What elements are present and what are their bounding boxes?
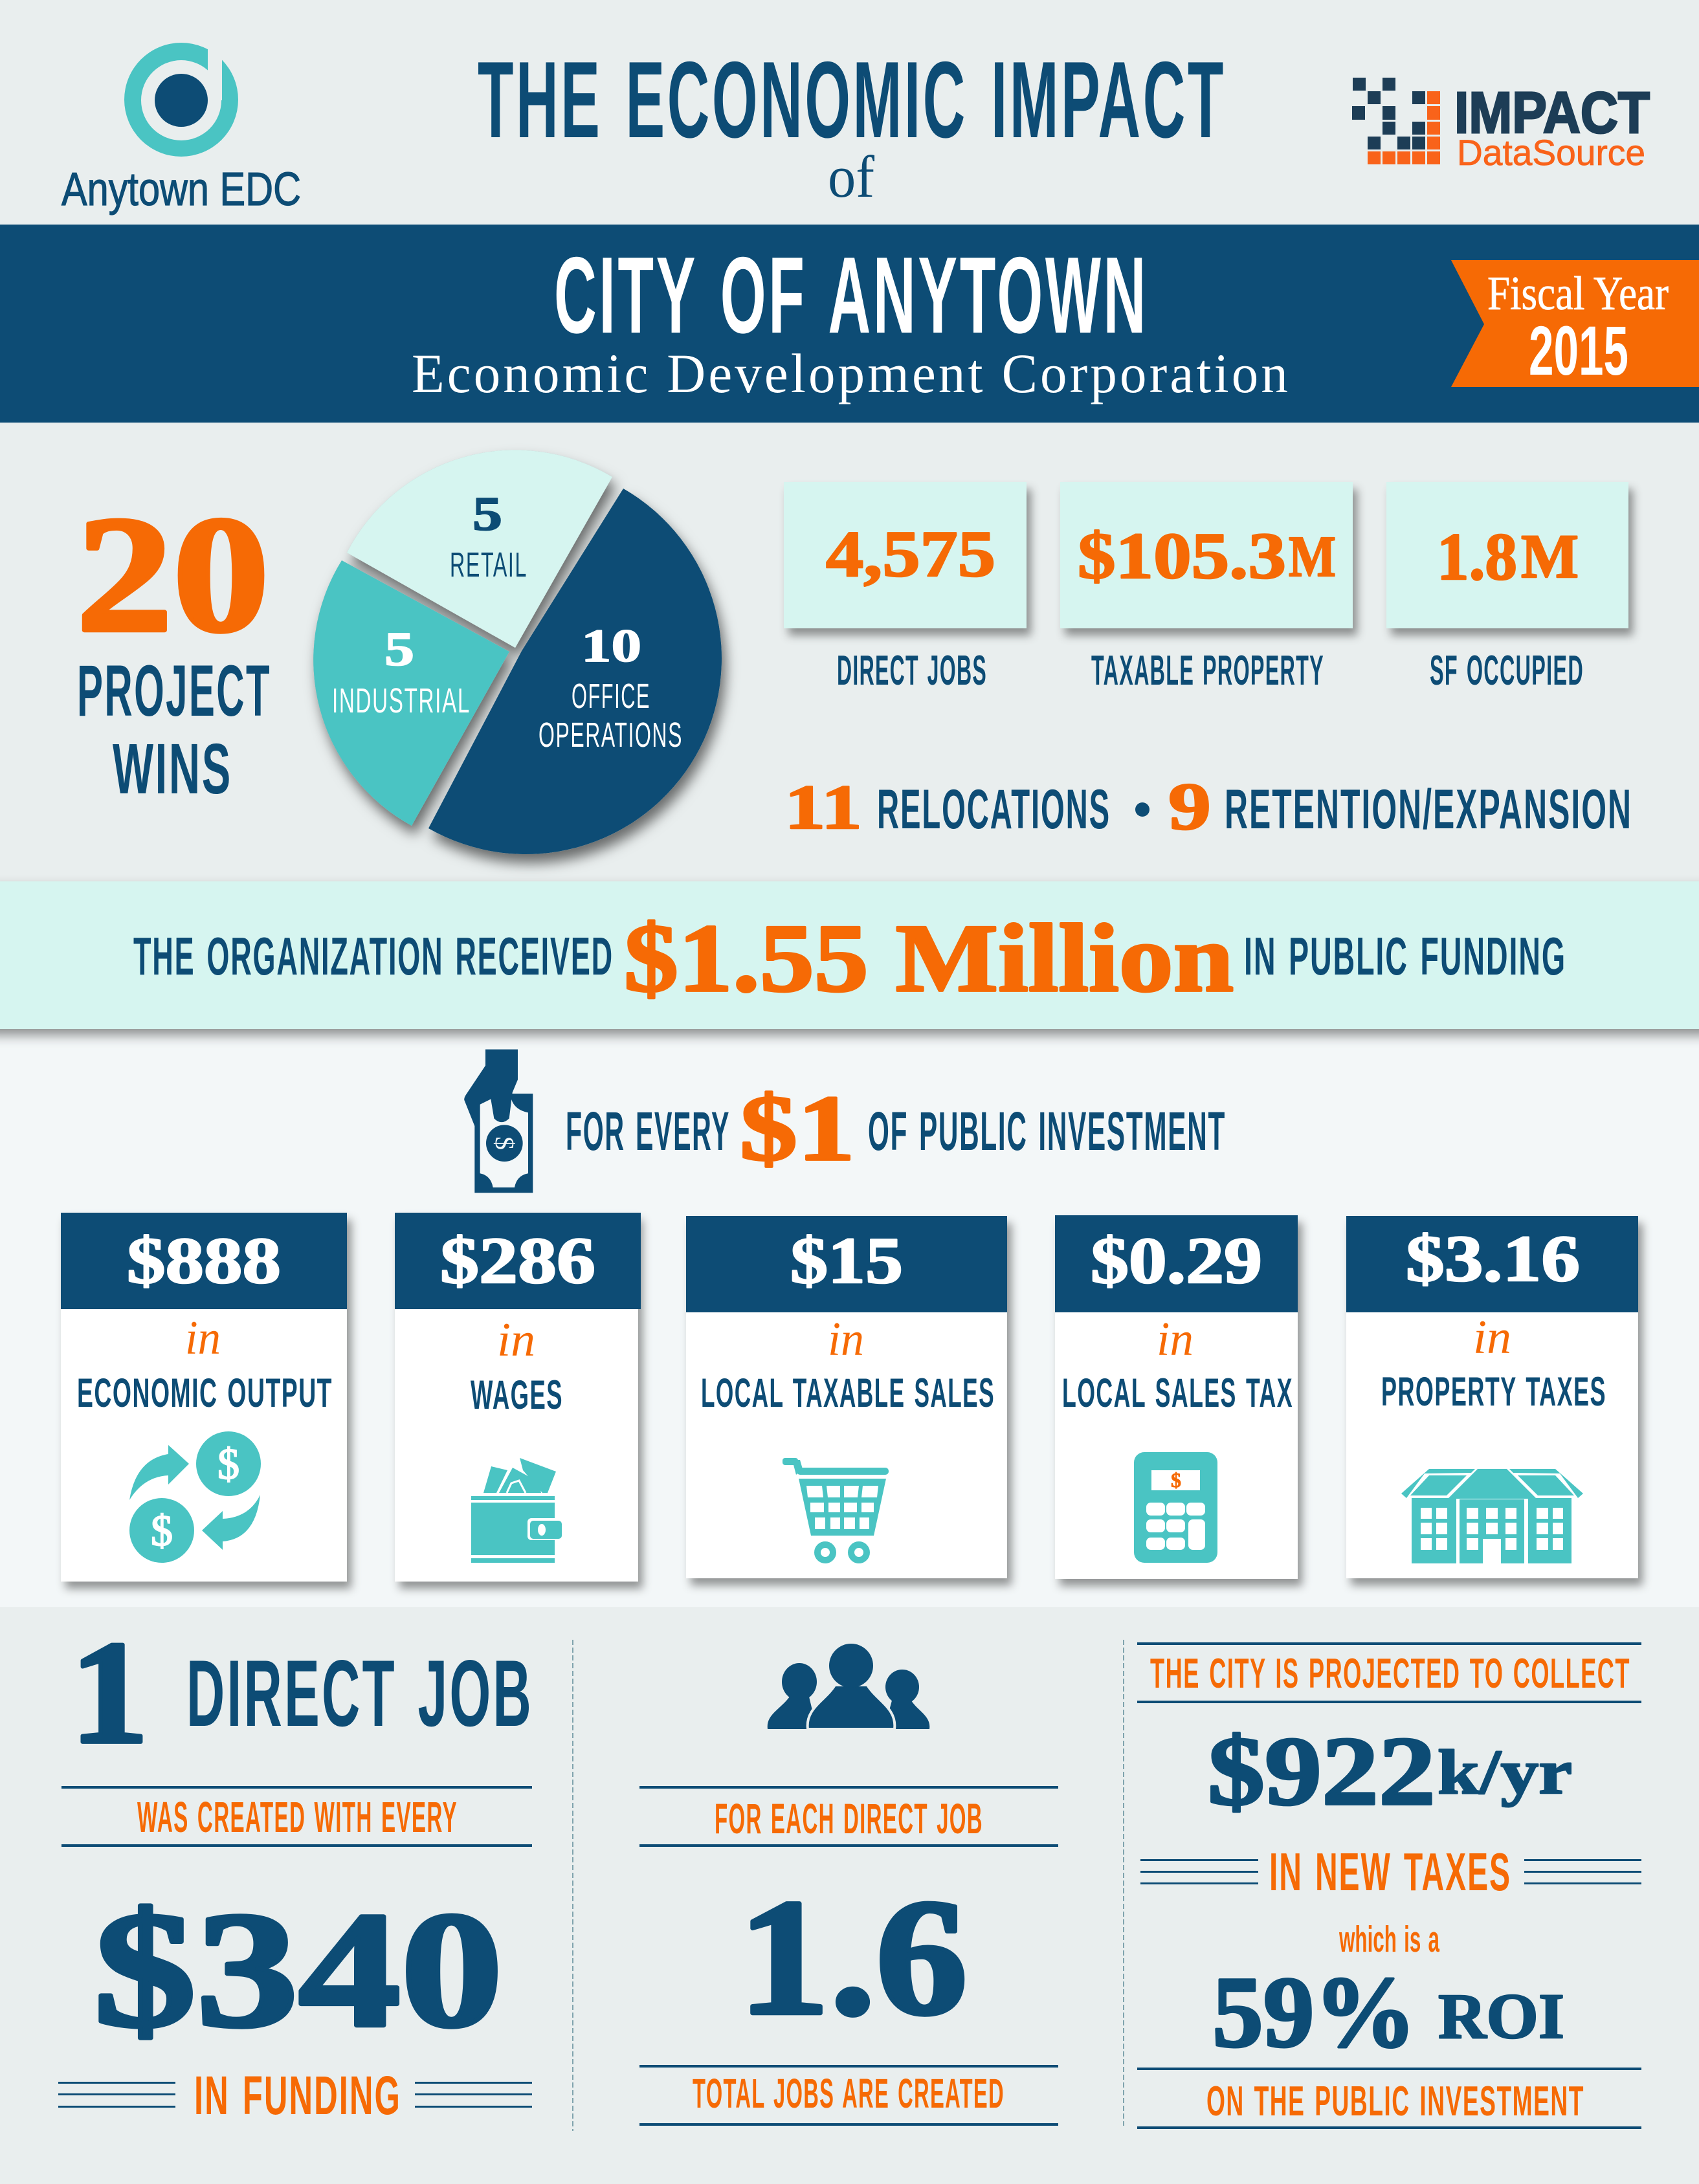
- relocations and retention line: 9: [1168, 769, 1211, 844]
- icon: wallet: [471, 1458, 562, 1563]
- column: total jobs: TOTAL JOBS ARE CREATED: [693, 2070, 1005, 2117]
- card: economic output: ECONOMIC OUTPUT: [77, 1371, 333, 1416]
- label: industrial: [332, 623, 471, 720]
- icon: calculator: $: [1171, 1468, 1181, 1492]
- card: economic output: $888: [127, 1224, 281, 1297]
- funding band: $1.55 Million: [624, 905, 1234, 1012]
- card: local taxable sales: [686, 1216, 1007, 1578]
- label: office operations: OPERATIONS: [539, 716, 683, 755]
- column: total jobs: FOR EACH DIRECT JOB: [715, 1794, 983, 1842]
- label: industrial: INDUSTRIAL: [332, 681, 471, 720]
- label: office operations: [539, 620, 683, 755]
- card: economic output: in: [185, 1312, 221, 1365]
- icon: building: [1401, 1469, 1583, 1563]
- relocations and retention line: [784, 769, 1632, 844]
- logo: Impact DataSource: [1352, 78, 1650, 173]
- stat: square feet occupied: 1.8: [1437, 520, 1517, 594]
- logo: Impact DataSource: DataSource: [1457, 132, 1645, 173]
- logo: Anytown EDC: Anytown EDC: [61, 164, 301, 215]
- relocations and retention line: RELOCATIONS: [877, 778, 1111, 841]
- stat: square feet occupied: [1386, 482, 1628, 694]
- banner heading: CITY OF ANYTOWN: [554, 234, 1148, 356]
- title: of: [828, 144, 874, 210]
- column: direct job funding: IN FUNDING: [194, 2065, 401, 2126]
- funding band: THE ORGANIZATION RECEIVED: [133, 926, 614, 986]
- card: wages: $286: [440, 1224, 595, 1297]
- column: new taxes and ROI: k/yr: [1438, 1737, 1572, 1807]
- card: local sales tax: $0.29: [1091, 1224, 1262, 1297]
- label: office operations: OFFICE: [572, 677, 650, 716]
- label: retail: [450, 488, 527, 584]
- stat: taxable property: [1060, 482, 1353, 694]
- title: [478, 39, 1226, 210]
- column: new taxes and ROI: 59%: [1212, 1956, 1416, 2068]
- icon: money exchange: [129, 1431, 261, 1563]
- header: [61, 39, 1650, 215]
- column: new taxes and ROI: IN NEW TAXES: [1269, 1842, 1511, 1902]
- column: total jobs: 1.6: [738, 1865, 968, 2049]
- stat: square feet occupied: M: [1521, 522, 1579, 591]
- stat: direct jobs: [784, 482, 1027, 694]
- project wins total: PROJECT: [77, 650, 271, 731]
- card: economic output: [61, 1213, 347, 1582]
- column: new taxes and ROI: which is a: [1338, 1919, 1440, 1960]
- column: direct job funding: [58, 1611, 533, 2126]
- card: local taxable sales: LOCAL TAXABLE SALES: [701, 1371, 995, 1416]
- column: new taxes and ROI: $922: [1208, 1717, 1436, 1826]
- icon: money exchange: $: [217, 1439, 239, 1488]
- column: direct job funding: 1: [70, 1611, 149, 1774]
- funding band: [0, 881, 1699, 1029]
- label: retail: RETAIL: [450, 546, 527, 584]
- label: office operations: 10: [581, 620, 641, 672]
- label: retail: 5: [472, 488, 502, 541]
- column: direct job funding: WAS CREATED WITH EVERY: [137, 1793, 458, 1842]
- pie chart: project types: [313, 450, 722, 854]
- card: property taxes: [1346, 1216, 1638, 1578]
- label: industrial: 5: [384, 623, 414, 676]
- banner: city name: [0, 225, 1699, 423]
- column: direct job funding: $340: [94, 1879, 503, 2062]
- icon: people: [768, 1644, 929, 1729]
- column: new taxes and ROI: ROI: [1438, 1980, 1564, 2052]
- card: wages: WAGES: [471, 1373, 563, 1418]
- card: local sales tax: in: [1157, 1313, 1194, 1366]
- icon: money exchange: $: [151, 1506, 173, 1555]
- banner subheading: Economic Development Corporation: [412, 342, 1291, 404]
- relocations and retention line: 11: [784, 773, 862, 843]
- ribbon: fiscal year: [1451, 260, 1699, 390]
- icon: hand holding bill: [464, 1050, 533, 1193]
- column: total jobs: [639, 1644, 1058, 2126]
- card: wages: in: [497, 1314, 535, 1367]
- icon: calculator: [1134, 1452, 1217, 1563]
- ribbon: fiscal year: Fiscal Year: [1487, 267, 1669, 320]
- card: local taxable sales: $15: [790, 1224, 903, 1297]
- logo: Anytown EDC: [61, 39, 301, 215]
- heading: for every $1: $1: [740, 1077, 855, 1180]
- heading: for every $1: [566, 1077, 1226, 1180]
- stat: taxable property: TAXABLE PROPERTY: [1091, 646, 1324, 694]
- ribbon: fiscal year: 2015: [1529, 311, 1628, 390]
- stat: taxable property: $105.3: [1078, 520, 1286, 593]
- icon: hand holding bill: $: [489, 1136, 519, 1150]
- heading: for every $1: OF PUBLIC INVESTMENT: [868, 1101, 1226, 1162]
- card: property taxes: $3.16: [1406, 1222, 1580, 1296]
- logo: Impact DataSource: IMPACT: [1454, 81, 1650, 146]
- card: local sales tax: LOCAL SALES TAX: [1062, 1371, 1293, 1416]
- heading: for every $1: FOR EVERY: [566, 1101, 730, 1162]
- column: direct job funding: DIRECT JOB: [186, 1640, 533, 1746]
- card: property taxes: in: [1473, 1311, 1511, 1364]
- card: local taxable sales: in: [828, 1313, 864, 1366]
- card: wages: [395, 1213, 641, 1582]
- icon: shopping cart: [783, 1458, 889, 1560]
- project wins total: [76, 482, 271, 809]
- project wins total: 20: [76, 482, 269, 667]
- stat: direct jobs: 4,575: [826, 518, 995, 591]
- project wins total: WINS: [113, 729, 232, 809]
- card: local sales tax: [1055, 1215, 1298, 1579]
- stat: taxable property: M: [1289, 525, 1336, 589]
- column: new taxes and ROI: [1137, 1642, 1641, 2129]
- stat: direct jobs: DIRECT JOBS: [837, 646, 987, 694]
